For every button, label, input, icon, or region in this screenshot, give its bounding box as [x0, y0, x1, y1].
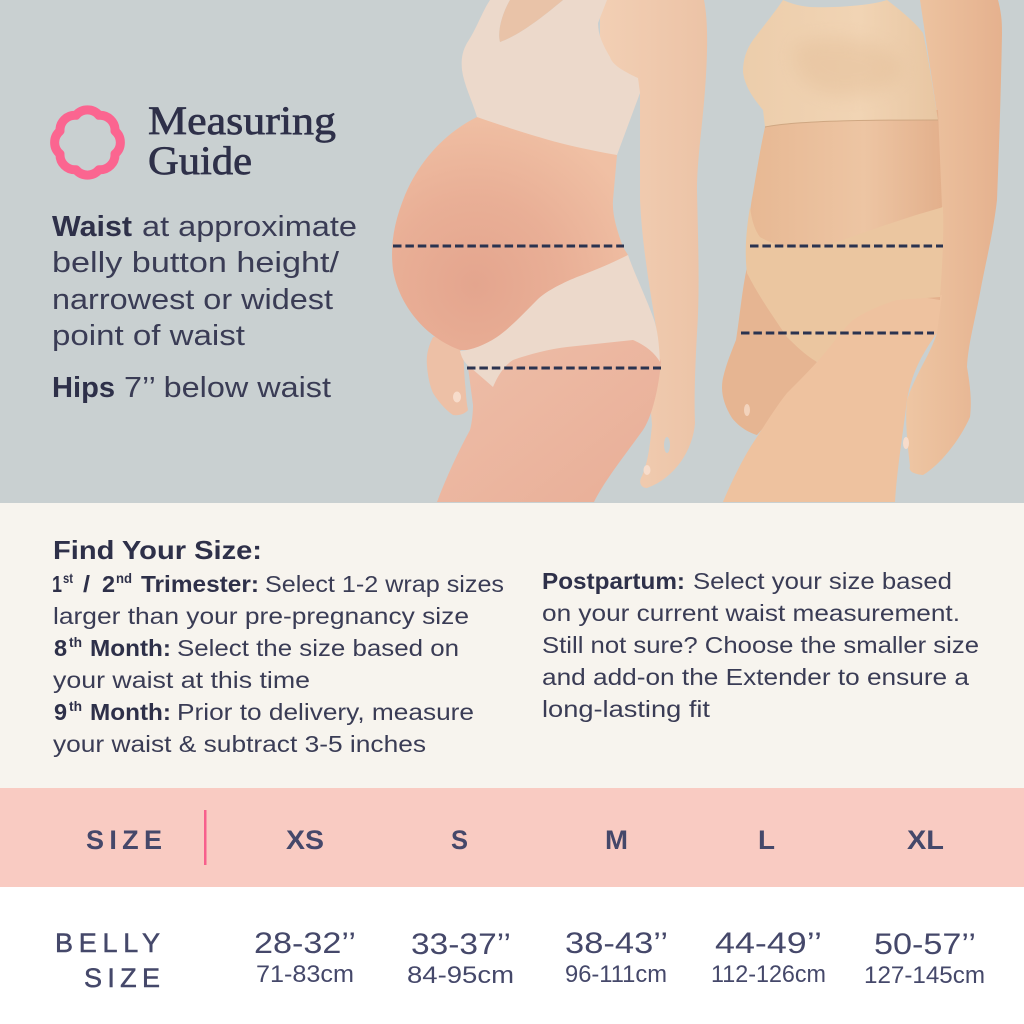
text: measuring instructions	[52, 211, 357, 404]
title: Measuring Guide: Guide	[148, 138, 252, 183]
waist line on pregnant figure	[393, 244, 624, 248]
hips line on pregnant figure	[467, 366, 661, 370]
title: Measuring Guide: Measuring	[148, 98, 336, 143]
text: postpartum guidance: on your current waist measurement.	[542, 600, 960, 626]
text: trimester guidance: 2	[102, 571, 115, 597]
text: trimester guidance: 1	[52, 571, 62, 597]
text: trimester guidance: 8	[54, 635, 67, 661]
panel: find your size background	[0, 503, 1024, 788]
text: trimester guidance: Prior to delivery, measure	[177, 699, 474, 725]
text: trimester guidance: th	[69, 634, 82, 650]
icon: pink scalloped ring	[55, 110, 120, 175]
text: measuring instructions: Hips	[52, 372, 115, 404]
heading: Find Your Size: Find Your Size:	[53, 535, 262, 565]
row values: M: 38-43’’	[565, 927, 668, 960]
text: trimester guidance: /	[83, 571, 91, 597]
photo: non-pregnant figure in side view	[722, 0, 1002, 502]
row label: belly size: SIZE	[84, 963, 160, 993]
hips line on non-pregnant figure	[741, 332, 934, 334]
photo: pregnant figure in side view	[392, 0, 707, 502]
text: measuring instructions: at approximate	[142, 211, 357, 243]
text: trimester guidance: Trimester:	[141, 571, 259, 597]
text: trimester guidance: Month:	[90, 699, 171, 725]
table header: sizes: L	[758, 825, 775, 855]
panel: photo background	[0, 0, 1024, 503]
text: measuring instructions: narrowest or widest	[52, 284, 333, 316]
table header: sizes: M	[605, 825, 628, 855]
row values: M	[565, 927, 668, 988]
text: trimester guidance: th	[69, 698, 82, 714]
text: trimester guidance: st	[63, 570, 73, 586]
row values: XS	[254, 927, 356, 988]
text: postpartum guidance: long-lasting fit	[542, 696, 711, 722]
row values: S	[407, 928, 514, 989]
row values: M: 96-111cm	[565, 961, 667, 988]
text: trimester guidance: 9	[54, 699, 67, 725]
panel: size header band	[0, 788, 1024, 887]
table header: sizes: XS	[286, 825, 324, 855]
panel: belly size row background	[0, 887, 1024, 1024]
text: measuring instructions: belly button height/	[52, 247, 339, 279]
row label: belly size: BELLY	[55, 928, 160, 958]
text: trimester guidance: nd	[116, 570, 132, 586]
text: trimester guidance: larger than your pre-pregnancy size	[53, 603, 469, 629]
row values: S: 84-95cm	[407, 962, 514, 989]
text: postpartum guidance: Still not sure? Choose the smaller size	[542, 632, 979, 658]
text: measuring instructions: 7’’ below waist	[124, 372, 331, 404]
row label: belly size	[55, 928, 160, 993]
title: Measuring Guide	[148, 98, 336, 183]
table header: sizes	[86, 810, 944, 865]
row values: XS: 71-83cm	[256, 961, 354, 988]
row values: L: 112-126cm	[711, 961, 826, 988]
text: trimester guidance: Select the size based on	[177, 635, 459, 661]
text: trimester guidance: your waist at this time	[53, 667, 310, 693]
text: trimester guidance	[52, 570, 504, 757]
row values: XL: 50-57’’	[874, 928, 976, 961]
table header: sizes: SIZE	[86, 825, 162, 855]
text: postpartum guidance	[542, 568, 979, 722]
text: measuring instructions: point of waist	[52, 320, 245, 352]
text: postpartum guidance: Postpartum:	[542, 568, 685, 594]
row values: S: 33-37’’	[411, 928, 511, 961]
table header: sizes: S	[451, 825, 468, 855]
row values: XS: 28-32’’	[254, 927, 356, 960]
text: measuring instructions: Waist	[52, 211, 133, 243]
text: postpartum guidance: and add-on the Extender to ensure a	[542, 664, 970, 690]
row values: L: 44-49’’	[715, 927, 822, 960]
text: postpartum guidance: Select your size based	[693, 568, 952, 594]
text: trimester guidance: Select 1-2 wrap sizes	[265, 571, 504, 597]
text: trimester guidance: your waist & subtract 3-5 inches	[53, 731, 426, 757]
table header: sizes: XL	[907, 825, 944, 855]
row values: L	[711, 927, 826, 988]
waist line on non-pregnant figure	[750, 244, 943, 248]
row values: XL: 127-145cm	[864, 962, 985, 989]
row values: XL	[864, 928, 985, 989]
text: trimester guidance: Month:	[90, 635, 171, 661]
